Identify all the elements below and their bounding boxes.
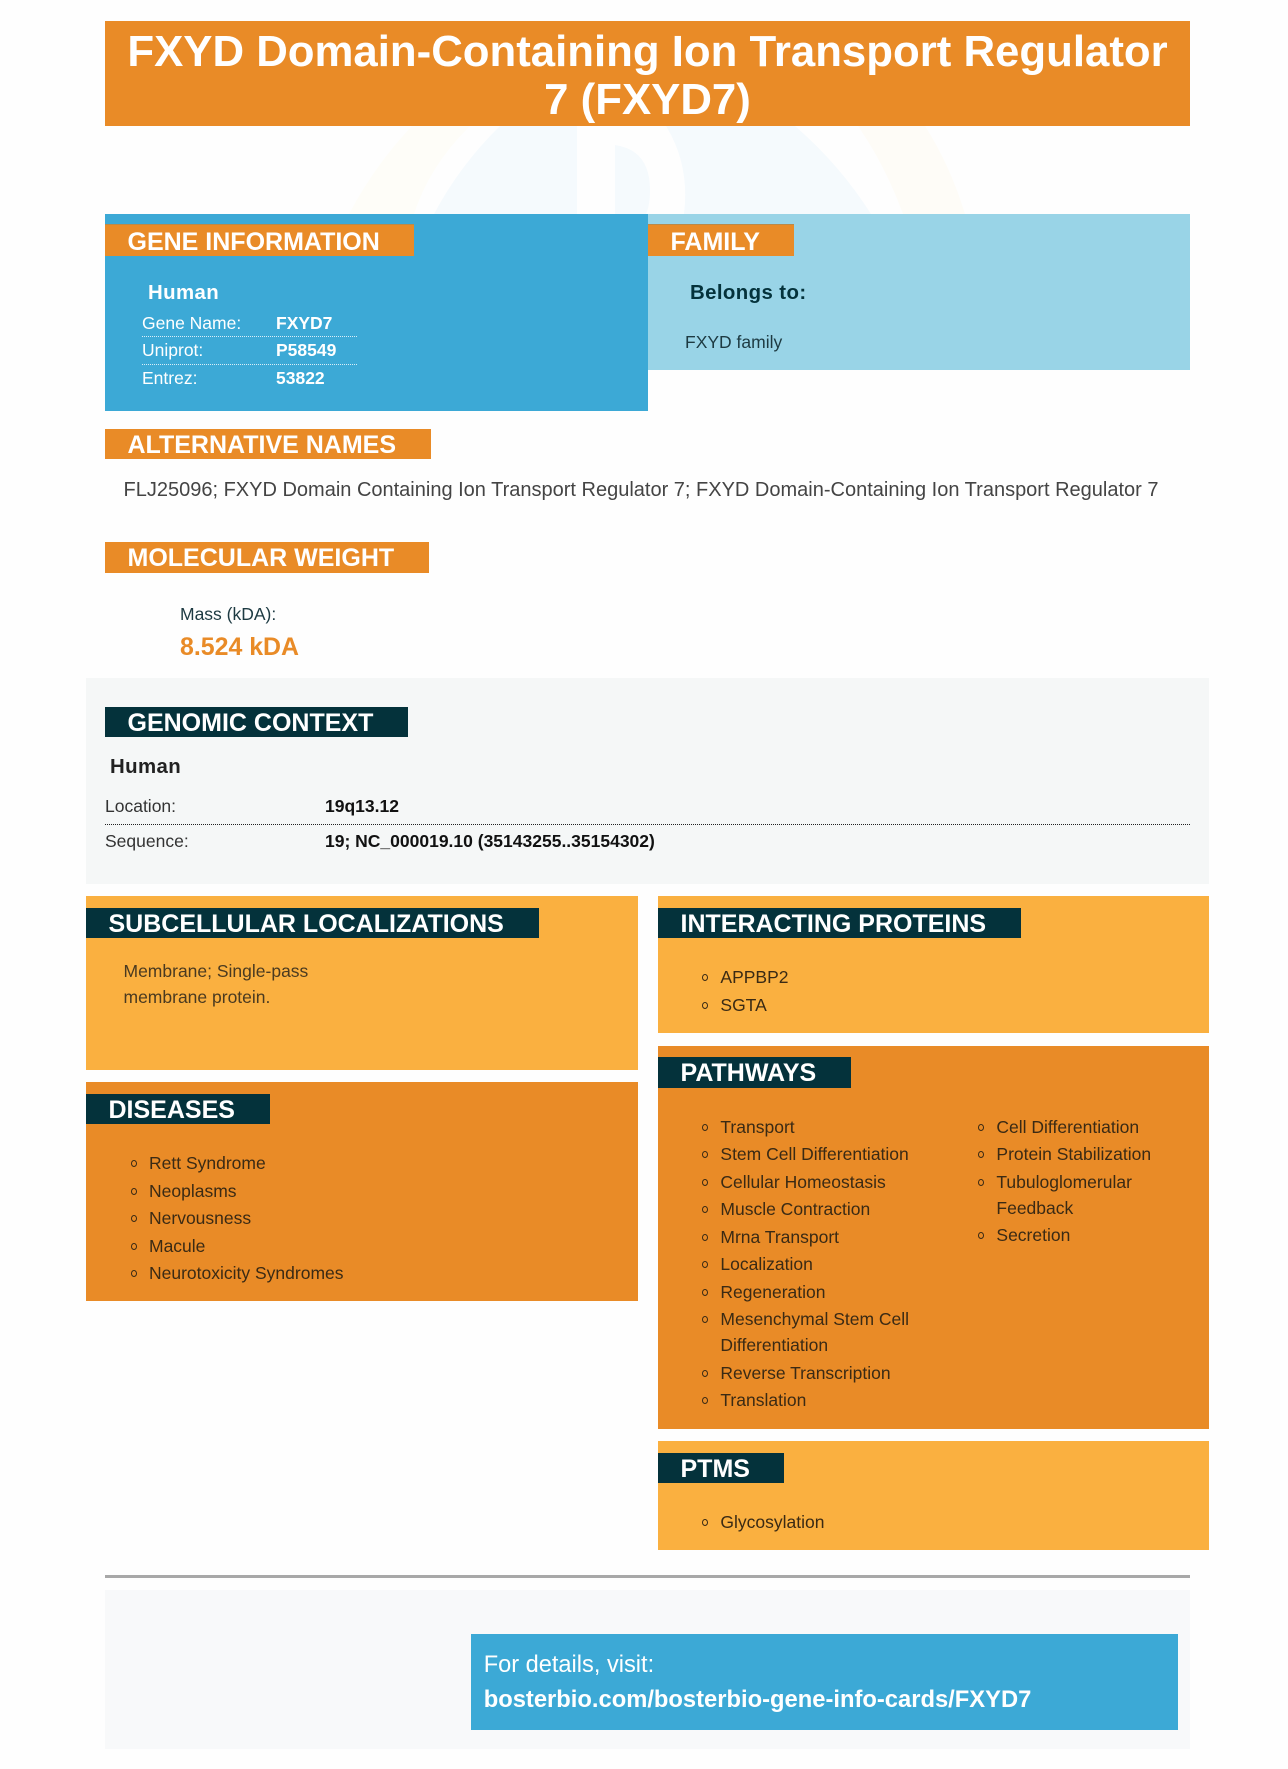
pathway list column 1	[702, 1117, 909, 1410]
pathway list column 1: Mesenchymal Stem Cell	[720, 1309, 909, 1329]
footer divider	[105, 1575, 1190, 1578]
pathway list column 2: Secretion	[996, 1225, 1070, 1245]
title banner: FXYD Domain-Containing Ion Transport Regulator	[127, 27, 1168, 76]
entrez row: Entrez:	[142, 368, 197, 388]
panel: footer	[105, 1590, 1190, 1749]
belongs to label: Belongs to:	[690, 282, 807, 304]
pathway list column 1: Cellular Homeostasis	[720, 1172, 886, 1192]
panel: diseases	[86, 1082, 638, 1301]
entrez row	[142, 368, 325, 388]
protein list	[702, 967, 788, 1015]
disease list: Neurotoxicity Syndromes	[149, 1263, 344, 1283]
pathway list column 2: Tubuloglomerular	[996, 1172, 1132, 1192]
pathway list column 1: Translation	[720, 1390, 806, 1410]
title banner: 7 (FXYD7)	[544, 75, 751, 124]
pathway list column 1: Localization	[720, 1254, 813, 1274]
disease list: Macule	[149, 1236, 205, 1256]
panel: PTMs	[658, 1441, 1209, 1550]
pathway list column 2: Cell Differentiation	[996, 1117, 1139, 1137]
uniprot row: Uniprot:	[142, 340, 203, 360]
pathway list column 1: Differentiation	[720, 1335, 828, 1355]
pathway list column 2: Feedback	[996, 1198, 1073, 1218]
location row	[105, 793, 1190, 825]
protein list: APPBP2	[720, 967, 788, 987]
title banner	[105, 21, 1190, 126]
callout: details link	[471, 1634, 1178, 1730]
gene name row	[142, 310, 357, 337]
heading: gene information: GENE INFORMATION	[128, 228, 380, 256]
callout label: For details, visit:	[484, 1652, 654, 1678]
heading: family	[648, 224, 794, 256]
heading: pathways	[658, 1057, 851, 1088]
panel: interacting proteins	[658, 896, 1209, 1033]
pathway list column 1: Transport	[720, 1117, 795, 1137]
panel: pathways	[658, 1046, 1209, 1429]
pathway list column 2: Protein Stabilization	[996, 1144, 1151, 1164]
alternative names text: FLJ25096; FXYD Domain Containing Ion Transport Regulator 7; FXYD Domain-Containing Ion Transport Regulator 7	[124, 479, 1158, 501]
pathway list column 1: Stem Cell Differentiation	[720, 1144, 909, 1164]
gene name row: FXYD7	[276, 313, 332, 333]
heading: alternative names: ALTERNATIVE NAMES	[128, 431, 396, 459]
heading: interacting proteins: INTERACTING PROTEINS	[680, 910, 986, 938]
panel: family	[648, 214, 1190, 370]
heading: diseases: DISEASES	[108, 1096, 235, 1124]
background watermark logo	[434, 126, 870, 214]
disease list: Nervousness	[149, 1208, 251, 1228]
panel: genomic context	[86, 678, 1209, 884]
heading: pathways: PATHWAYS	[680, 1059, 816, 1087]
location row: 19q13.12	[325, 796, 399, 816]
heading: family: FAMILY	[670, 228, 760, 256]
pathway list column 1: Mrna Transport	[720, 1227, 839, 1247]
pathway list column 1: Muscle Contraction	[720, 1199, 870, 1219]
panel: gene information: 53822	[276, 368, 325, 388]
disease list: Neoplasms	[149, 1181, 237, 1201]
heading: diseases	[86, 1094, 270, 1124]
callout URL: bosterbio.com/bosterbio-gene-info-cards/FXYD7	[484, 1686, 1031, 1713]
panel: gene information	[105, 214, 648, 411]
protein list: SGTA	[720, 995, 767, 1015]
localization text: membrane protein.	[124, 987, 270, 1007]
localization text	[124, 961, 308, 1007]
panel: subcellular localizations	[86, 896, 638, 1070]
family value: FXYD family	[685, 332, 782, 352]
disease list	[131, 1153, 344, 1283]
heading: molecular weight: MOLECULAR WEIGHT	[128, 544, 394, 572]
heading: subcellular localizations: SUBCELLULAR LOCALIZATIONS	[108, 910, 504, 938]
heading: PTMs: PTMS	[680, 1455, 750, 1483]
location row: Location:	[105, 796, 176, 816]
mass value: 8.524 kDA	[180, 633, 299, 661]
panel: genomic context: 19; NC_000019.10 (35143255..35154302)	[325, 831, 655, 851]
gene name row: Gene Name:	[142, 313, 241, 333]
uniprot row: P58549	[276, 340, 336, 360]
molecular weight value	[180, 604, 299, 661]
species label: Human	[110, 756, 181, 778]
pathway list column 1: Reverse Transcription	[720, 1363, 891, 1383]
localization text: Membrane; Single-pass	[124, 961, 308, 981]
heading: PTMs	[658, 1453, 784, 1483]
mass label: Mass (kDA):	[180, 604, 276, 624]
disease list: Rett Syndrome	[149, 1153, 266, 1173]
PTM list: Glycosylation	[720, 1512, 824, 1532]
heading: genomic context: GENOMIC CONTEXT	[128, 709, 373, 737]
sequence row: Sequence:	[105, 831, 189, 851]
sequence row	[105, 831, 655, 851]
species label: Human	[148, 282, 219, 304]
pathway list column 1: Regeneration	[720, 1282, 825, 1302]
uniprot row	[142, 337, 357, 365]
pathway list column 2	[978, 1117, 1151, 1245]
